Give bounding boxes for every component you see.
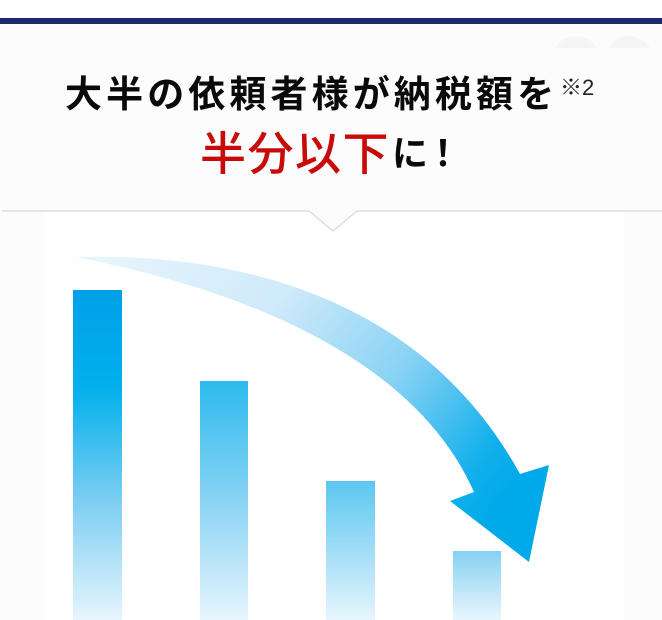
bar 4	[453, 551, 501, 620]
white chart panel	[44, 212, 624, 620]
title line 1: 大半の依頼者様が納税額を	[65, 74, 558, 115]
title line 2 highlight: 半分以下	[200, 128, 390, 180]
bar 1	[73, 290, 122, 620]
curved downward arrow	[75, 257, 549, 562]
title	[65, 74, 594, 180]
title line 2 ending: に！	[392, 133, 458, 174]
bar chart	[73, 290, 501, 620]
speech pointer divider	[2, 211, 662, 231]
bar 3	[326, 481, 375, 620]
bar 2	[200, 381, 248, 620]
footnote mark: ※2	[560, 75, 594, 100]
